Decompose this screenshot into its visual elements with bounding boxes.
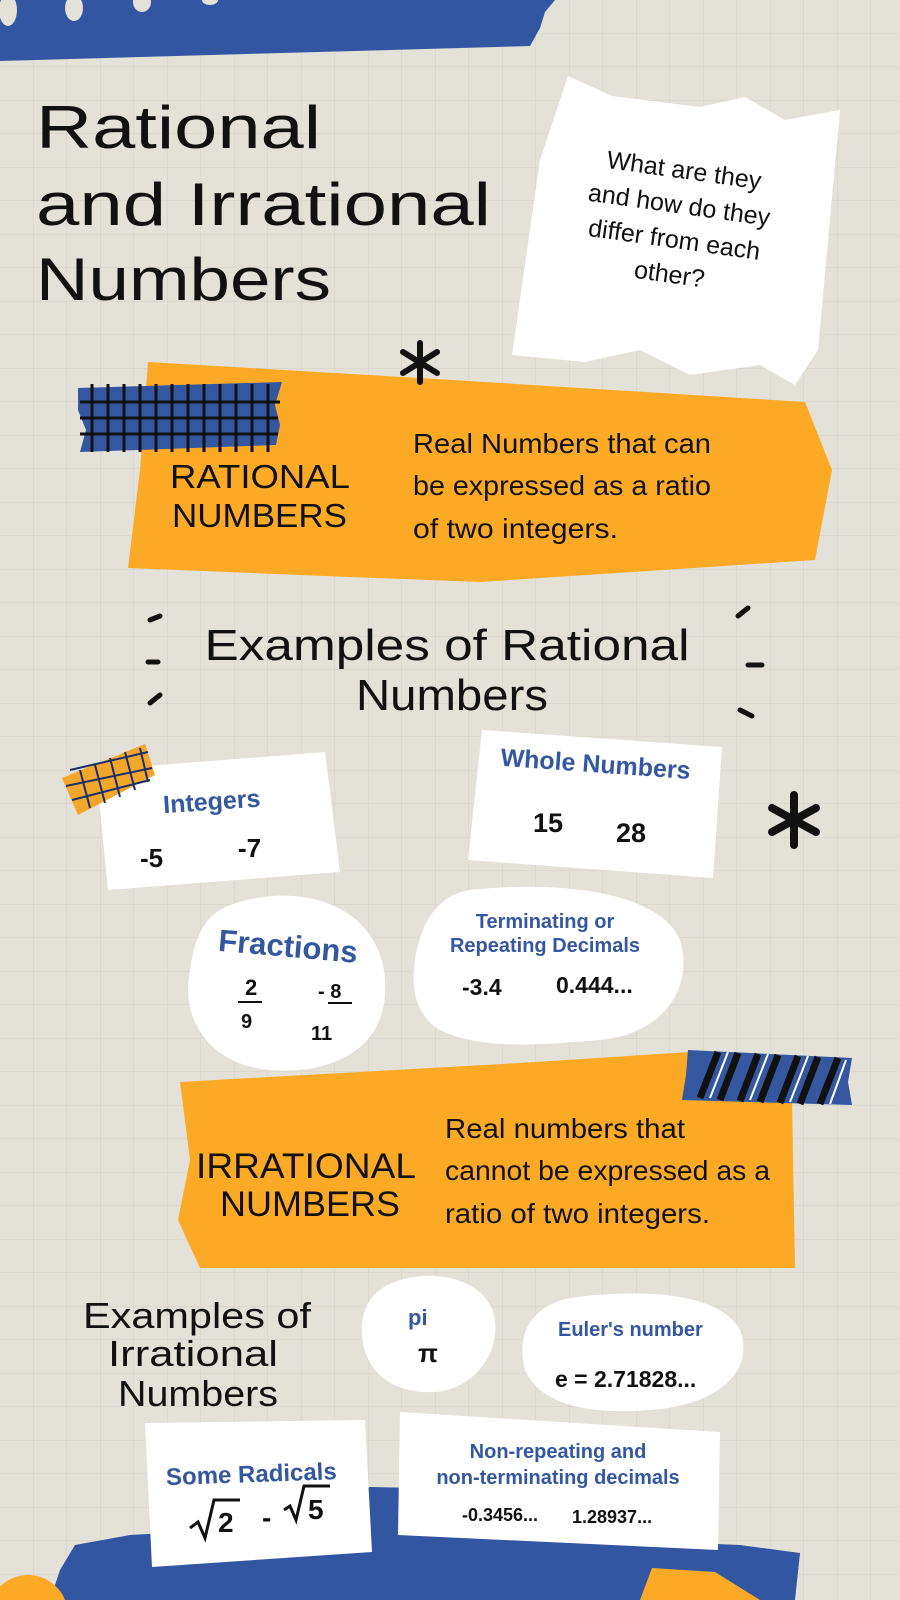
card: non-repeating and non-terminating decimals: [398, 1412, 720, 1550]
card: some radicals: Some Radicals: [166, 1458, 337, 1491]
text block: irrational definition: Real numbers that: [445, 1113, 685, 1144]
title: Numbers: [36, 246, 331, 313]
card: fractions: 2: [245, 975, 257, 1000]
bottom blue shape: [50, 1487, 800, 1600]
heading: examples of rational numbers: [148, 608, 762, 720]
card: euler's number: [522, 1293, 743, 1411]
top blue tape banner: [0, 0, 555, 61]
card: terminating or repeating decimals: Terminating or: [476, 911, 614, 933]
card: pi: [362, 1276, 496, 1392]
panel: rational numbers: [78, 343, 832, 582]
text block: rational definition: Real Numbers that can: [413, 428, 711, 459]
card: some radicals: 5: [308, 1494, 324, 1525]
card: some radicals: -: [262, 1502, 271, 1533]
card: non-repeating and non-terminating decimals: -0.3456...: [462, 1505, 538, 1525]
heading: irrational numbers: [196, 1147, 416, 1224]
heading: rational numbers: RATIONAL: [170, 458, 350, 495]
card: fractions: [188, 896, 385, 1071]
card: fractions: 11: [311, 1023, 332, 1045]
card: integers: [62, 744, 340, 890]
card: non-repeating and non-terminating decimals: Non-repeating and: [470, 1441, 646, 1463]
heading: examples of irrational numbers: Examples of: [83, 1295, 312, 1336]
title: [36, 94, 491, 313]
tape: orange grid: [62, 744, 155, 815]
heading: rational numbers: [170, 458, 350, 534]
bottom orange shapes: [0, 1575, 68, 1600]
callout: question note: What are they: [605, 146, 764, 195]
card: pi: π: [418, 1338, 438, 1368]
card: pi: pi: [408, 1305, 428, 1330]
card: fractions: - 8: [318, 981, 341, 1003]
card: some radicals: [145, 1420, 372, 1567]
tape: blue grid: [78, 382, 282, 452]
card: terminating or repeating decimals: -3.4: [462, 974, 502, 1000]
icon: asterisk right: [772, 795, 816, 845]
panel: irrational numbers: [178, 1050, 852, 1268]
card: non-repeating and non-terminating decimals: non-terminating decimals: [436, 1467, 680, 1489]
text block: rational definition: of two integers.: [413, 513, 618, 544]
callout: question note: differ from each: [587, 214, 762, 266]
icon: asterisk: [403, 343, 437, 382]
text block: rational definition: [413, 428, 711, 544]
card: non-repeating and non-terminating decimals: 1.28937...: [572, 1507, 652, 1527]
heading: rational numbers: NUMBERS: [172, 497, 347, 534]
card: some radicals: 2: [218, 1507, 234, 1538]
title: and Irrational: [36, 171, 491, 238]
card: terminating or repeating decimals: Repeating Decimals: [450, 935, 640, 957]
heading: examples of rational numbers: Examples of Rational: [204, 621, 690, 670]
card: whole numbers: [468, 730, 722, 878]
card: terminating or repeating decimals: [414, 887, 683, 1044]
heading: irrational numbers: IRRATIONAL: [196, 1147, 416, 1186]
heading: irrational numbers: NUMBERS: [220, 1185, 400, 1224]
card: fractions: 9: [241, 1011, 252, 1033]
card: whole numbers: 28: [616, 818, 646, 848]
card: euler's number: Euler's number: [558, 1319, 703, 1341]
text block: irrational definition: [445, 1113, 770, 1229]
card: integers: Integers: [162, 785, 261, 819]
card: integers: -5: [140, 843, 163, 873]
tape: striped: [682, 1050, 852, 1105]
card: integers: -7: [238, 833, 261, 863]
heading: examples of rational numbers: Numbers: [356, 671, 548, 720]
card: fractions: Fractions: [217, 923, 359, 970]
card: whole numbers: Whole Numbers: [500, 744, 691, 785]
text block: irrational definition: ratio of two integers.: [445, 1198, 710, 1229]
text block: rational definition: be expressed as a ratio: [413, 470, 711, 501]
text block: irrational definition: cannot be expressed as a: [445, 1155, 770, 1186]
title: Rational: [36, 94, 321, 161]
callout: question note: and how do they: [586, 179, 772, 232]
heading: examples of irrational numbers: [83, 1295, 312, 1414]
card: euler's number: e = 2.71828...: [555, 1366, 696, 1392]
card: whole numbers: 15: [533, 808, 563, 838]
card: terminating or repeating decimals: 0.444...: [556, 972, 633, 998]
heading: examples of irrational numbers: Numbers: [118, 1373, 278, 1414]
callout: question note: other?: [632, 256, 706, 293]
heading: examples of irrational numbers: Irrational: [108, 1333, 278, 1374]
callout: question note: [512, 76, 840, 385]
